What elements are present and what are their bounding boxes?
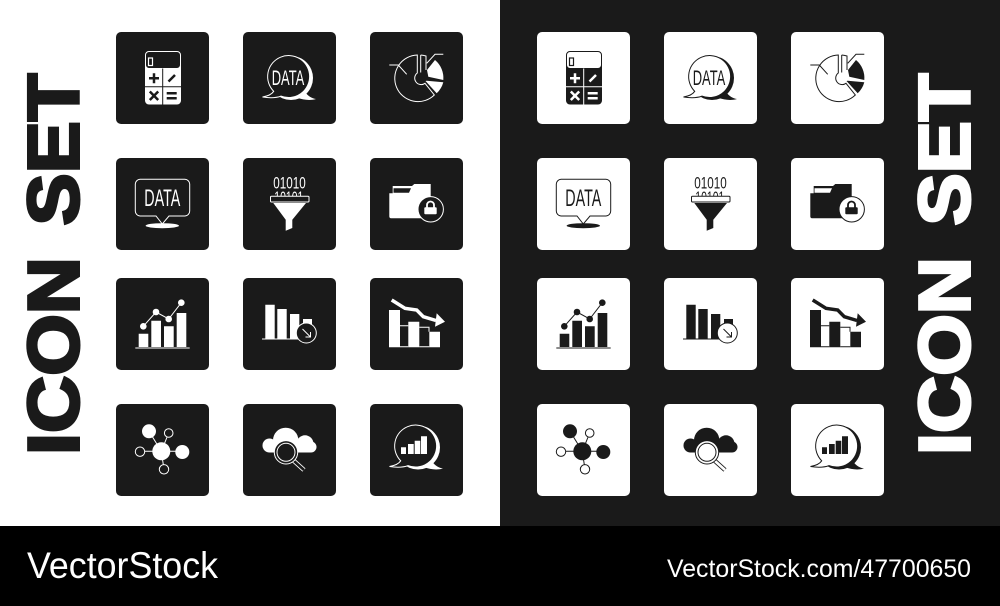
- icon: data location pin: DATA: [144, 185, 180, 212]
- heading: icon set: SET: [14, 73, 94, 226]
- icon: data funnel: 10101: [695, 189, 724, 207]
- icon: data funnel: 01010: [273, 175, 306, 193]
- icon: data speech bubble: [243, 32, 336, 124]
- icon: data location pin: [537, 158, 630, 250]
- heading: icon set: ICON: [14, 257, 94, 455]
- heading: icon set: [906, 73, 986, 455]
- icon: data speech bubble: [664, 32, 757, 124]
- icon: data funnel: 10101: [274, 189, 303, 207]
- heading: icon set: SET: [906, 73, 986, 226]
- panel: dark icon set: [500, 0, 1000, 526]
- icon: data speech bubble: DATA: [693, 67, 725, 90]
- icon: data funnel: 01010: [694, 175, 727, 193]
- icon: cloud search: [243, 404, 336, 496]
- icon: data funnel: [243, 158, 336, 250]
- icon: calculator: [537, 32, 630, 124]
- icon: declining chart with arrow: [791, 278, 884, 370]
- icon: data speech bubble: DATA: [272, 67, 304, 90]
- footer logo text: VectorStock: [27, 544, 218, 586]
- footer image id text: VectorStock.com/47700650: [667, 555, 971, 583]
- icon: data funnel: [664, 158, 757, 250]
- icon: cloud search: [664, 404, 757, 496]
- icon: pie chart: [791, 32, 884, 124]
- heading: icon set: ICON: [906, 257, 986, 455]
- icon: falling bars with clock: [664, 278, 757, 370]
- icon: falling bars with clock: [243, 278, 336, 370]
- icon: data location pin: [116, 158, 209, 250]
- icon: locked folder: [370, 158, 463, 250]
- icon: network nodes: [537, 404, 630, 496]
- icon: chart speech bubble: [791, 404, 884, 496]
- icon: rising bar chart: [116, 278, 209, 370]
- heading: icon set: [14, 73, 94, 455]
- icon: network nodes: [116, 404, 209, 496]
- icon: declining chart with arrow: [370, 278, 463, 370]
- icon: data location pin: DATA: [565, 185, 601, 212]
- icon: locked folder: [791, 158, 884, 250]
- panel: white icon set: [0, 0, 500, 526]
- footer bar: [0, 526, 1000, 606]
- icon: calculator: [116, 32, 209, 124]
- icon: pie chart: [370, 32, 463, 124]
- icon: chart speech bubble: [370, 404, 463, 496]
- icon: rising bar chart: [537, 278, 630, 370]
